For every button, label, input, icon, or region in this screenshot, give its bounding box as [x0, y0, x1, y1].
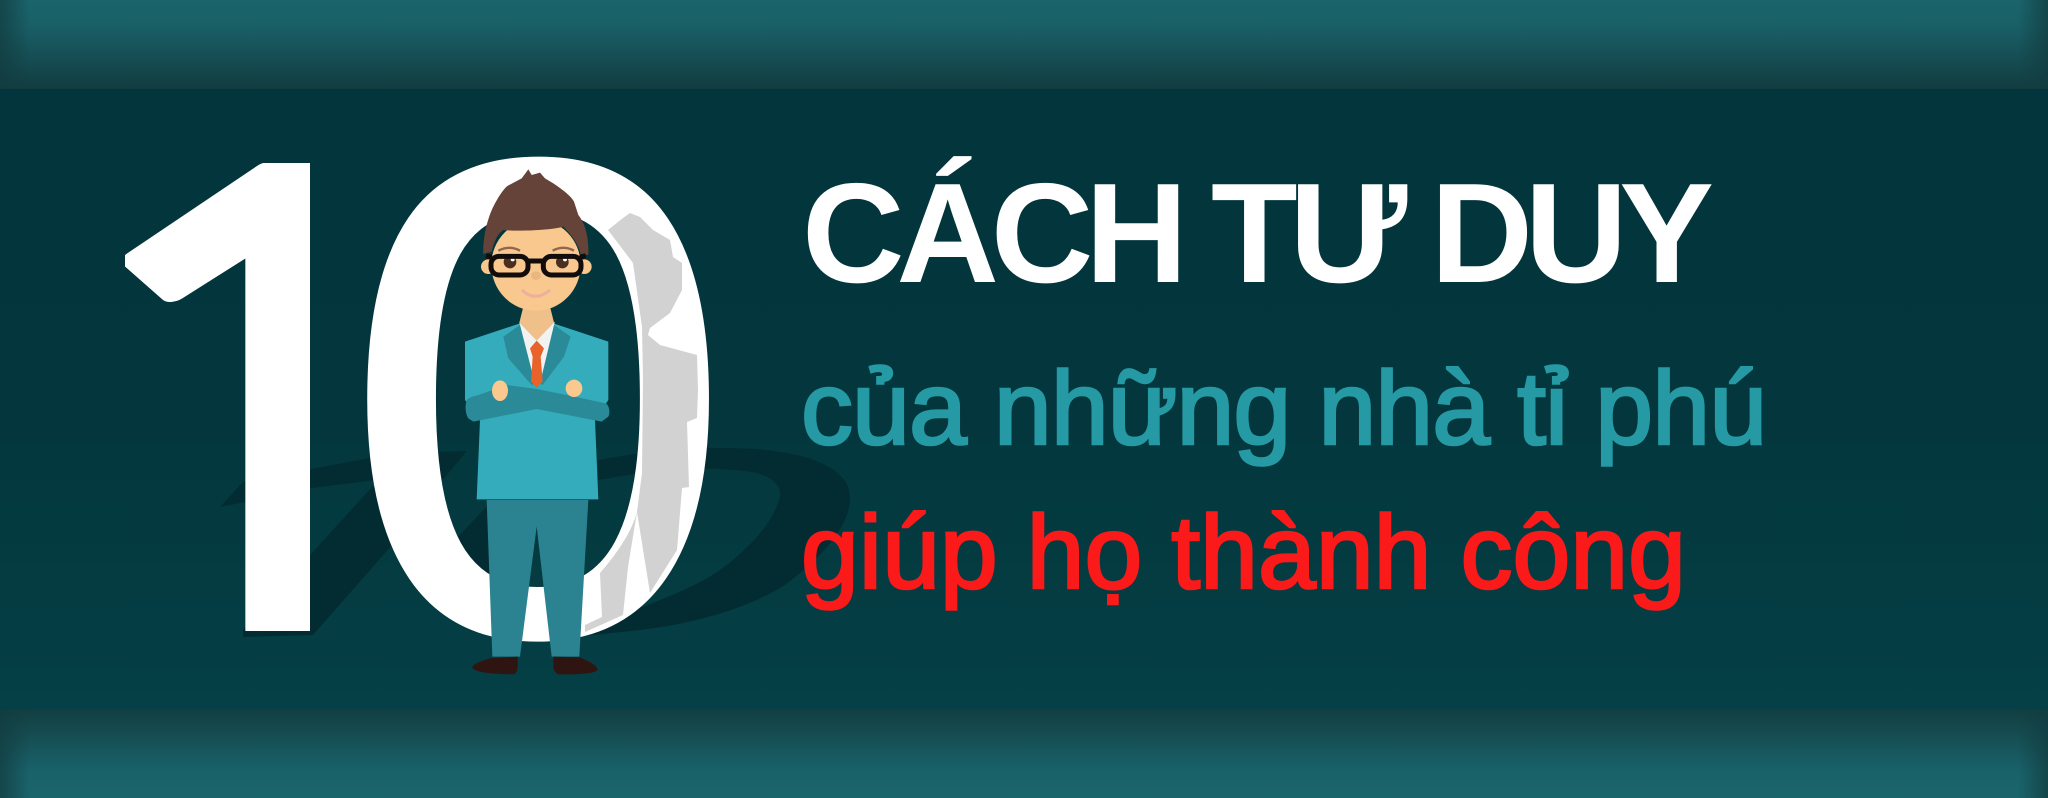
neck: [519, 307, 554, 341]
shirt: [519, 322, 555, 383]
heading line 1: CÁCH TƯ DUY: [802, 154, 1714, 313]
trousers: [487, 500, 588, 657]
businessman illustration: [465, 169, 609, 674]
shoes: [472, 657, 598, 674]
heading line 3: giúp họ thành công: [801, 495, 1686, 611]
lapels: [503, 325, 571, 385]
crossed arms: [466, 385, 609, 422]
bottom band: [0, 709, 2048, 798]
face: [491, 219, 581, 311]
digit 0: 0: [343, 20, 733, 776]
main panel background: [0, 89, 2048, 709]
eye highlights: [511, 257, 567, 261]
top band: [0, 0, 2048, 89]
ground shadow of the number: [220, 448, 850, 637]
eyes: [504, 256, 569, 268]
eyebrows: [498, 248, 574, 251]
tie: [530, 341, 544, 387]
heading line 2: của những nhà tỉ phú: [801, 351, 1767, 467]
heading: [801, 154, 1767, 611]
jacket: [465, 323, 608, 499]
number 10: [125, 156, 709, 674]
hands: [492, 380, 582, 401]
glasses: [486, 256, 586, 275]
man's shadow on the number: [585, 213, 698, 632]
ears: [481, 259, 592, 274]
nose: [531, 271, 541, 280]
digit 1: 1: [12, 109, 532, 729]
hair: [483, 169, 588, 255]
smile: [522, 290, 550, 296]
